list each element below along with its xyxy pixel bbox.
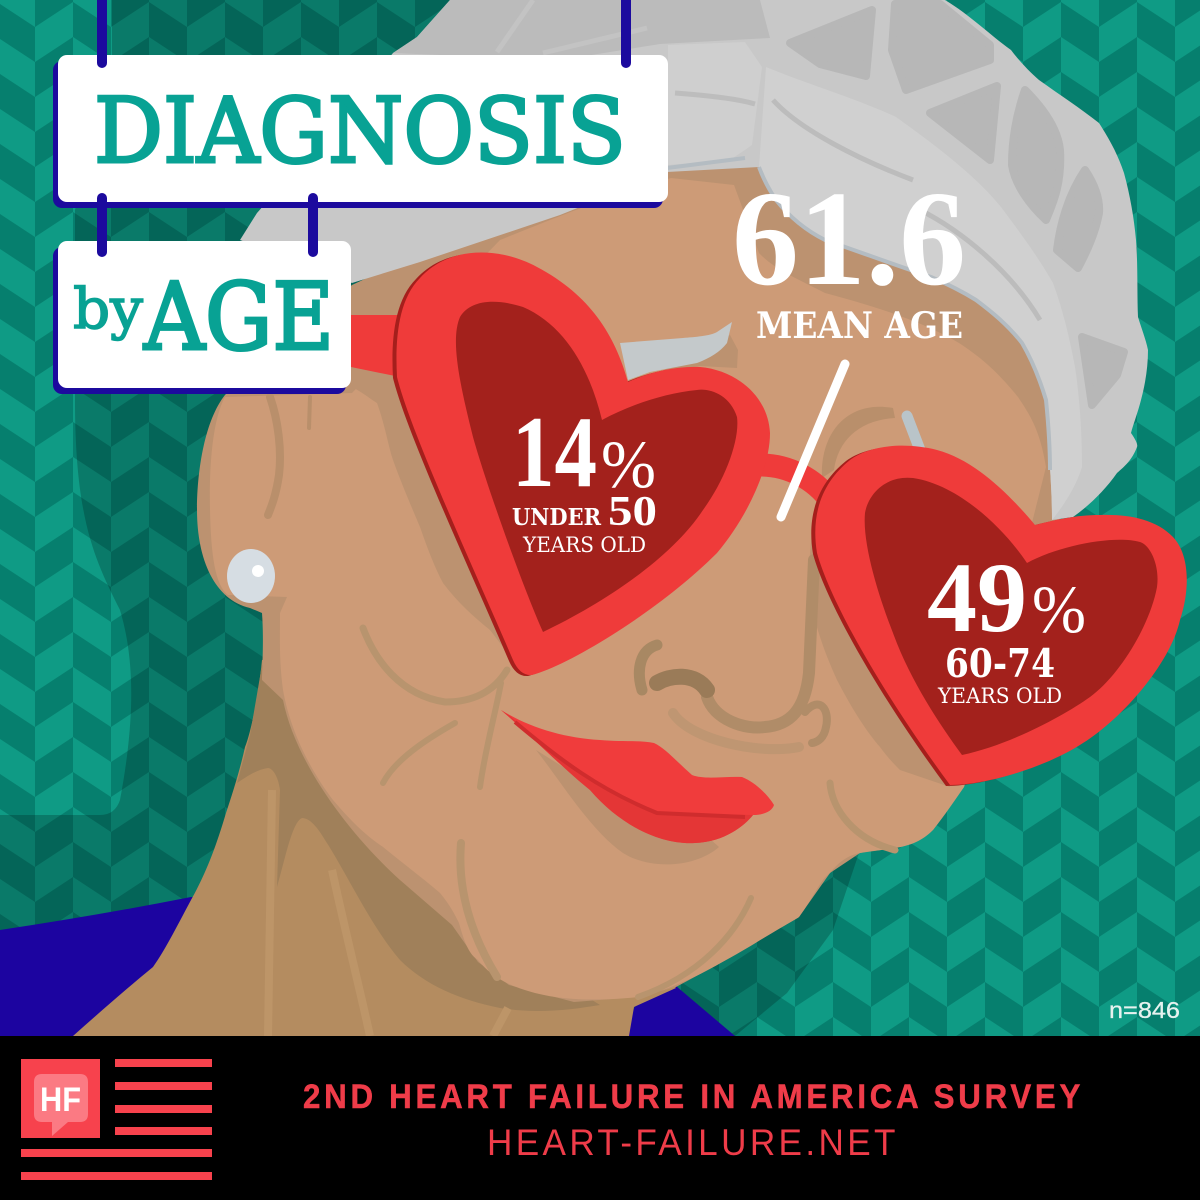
shadow under right lens (809, 520, 950, 787)
front hair lobe (759, 67, 1082, 520)
eyebrow right and socket (822, 407, 920, 478)
lips (501, 710, 774, 864)
left lens (456, 302, 737, 632)
earring (227, 549, 275, 603)
glasses (351, 252, 1187, 786)
logo: HF flag: HF (40, 1081, 81, 1119)
nose (639, 560, 827, 749)
left lens frame (396, 252, 770, 675)
footer: website: HEART-FAILURE.NET (487, 1121, 896, 1163)
stat: under 50: YEARS OLD (522, 533, 646, 557)
sample size: n=846 (1109, 997, 1180, 1023)
stat: under 50: 50 (608, 489, 657, 535)
stat: mean age: MEAN AGE (756, 305, 963, 347)
footer band (0, 1036, 1200, 1200)
sign hanging rods (102, 0, 626, 252)
stat: mean age: 61.6 (732, 164, 966, 314)
sign: by age (53, 241, 351, 394)
face (197, 140, 1060, 1002)
bridge (760, 465, 830, 500)
sign: by age: by (73, 277, 143, 342)
right lens (865, 478, 1158, 755)
shirt (0, 897, 735, 1036)
stat: under 50: UNDER (512, 504, 602, 531)
hair darker panels (790, 4, 1124, 405)
temple arm (351, 315, 405, 378)
ear line (268, 397, 310, 515)
pointer line (781, 364, 845, 517)
eyebrow left (620, 322, 738, 380)
right lens frame (815, 446, 1187, 785)
smile and cheek wrinkles (363, 628, 895, 997)
neck (73, 650, 676, 1036)
sign: by age: AGE (143, 263, 334, 371)
sign: diagnosis (53, 55, 668, 208)
stat: under 50: 14 (512, 396, 597, 509)
stat: under 50: % (601, 426, 656, 502)
shadow under left lens (352, 350, 540, 660)
left lens edge (392, 253, 766, 676)
stat: 60-74 (927, 542, 1086, 708)
stat: 60-74: 49 (927, 542, 1027, 653)
footer: survey title: 2ND HEART FAILURE IN AMERICA SURVEY (303, 1077, 1081, 1115)
logo: HF flag (21, 1059, 212, 1180)
stat: 60-74: YEARS OLD (937, 684, 1062, 708)
sign: diagnosis: DIAGNOSIS (94, 79, 626, 184)
stat: 60-74: % (1032, 571, 1086, 647)
right lens edge (811, 447, 1183, 786)
stat: 60-74: 60-74 (945, 641, 1055, 687)
speech bubble (34, 1074, 88, 1136)
stat: under 50 (512, 396, 657, 557)
hair (240, 0, 1148, 520)
